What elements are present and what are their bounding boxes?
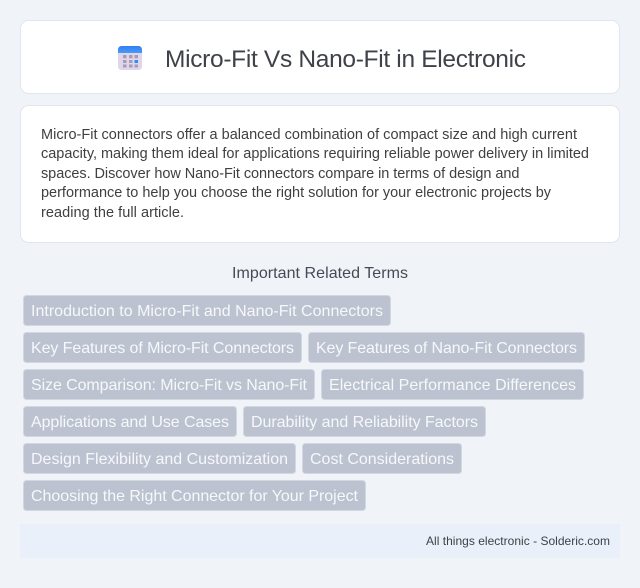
text block: description: Micro-Fit connectors offer a balanced combination of compact size and high current bbox=[41, 127, 577, 143]
tag bbox=[24, 480, 366, 510]
panel: related term tags bbox=[24, 296, 584, 510]
panel: title card bbox=[20, 20, 620, 94]
footer: All things electronic - Solderic.com bbox=[426, 534, 610, 548]
tag bbox=[302, 444, 462, 474]
text block: description: reading the full article. bbox=[41, 205, 184, 221]
title: Micro-Fit Vs Nano-Fit in Electronic bbox=[165, 46, 526, 73]
tag: Durability and Reliability Factors bbox=[251, 414, 478, 431]
tag bbox=[24, 332, 302, 362]
tag: Key Features of Micro-Fit Connectors bbox=[31, 340, 294, 357]
text block: description bbox=[41, 127, 589, 221]
tag: Electrical Performance Differences bbox=[329, 377, 576, 394]
tag bbox=[244, 406, 486, 436]
tag bbox=[24, 296, 390, 326]
text block: description: spaces. Discover how Nano-Fit connectors compare in terms of design and bbox=[41, 166, 520, 182]
tag: Key Features of Nano-Fit Connectors bbox=[316, 340, 577, 357]
tag bbox=[24, 444, 296, 474]
tag bbox=[308, 332, 584, 362]
tag: Applications and Use Cases bbox=[31, 414, 229, 431]
tag: Size Comparison: Micro-Fit vs Nano-Fit bbox=[31, 377, 308, 394]
text block: description: capacity, making them ideal for applications requiring reliable power delivery in limited bbox=[41, 146, 589, 162]
tag bbox=[322, 370, 584, 400]
tag: Cost Considerations bbox=[310, 451, 454, 468]
tag bbox=[24, 370, 314, 400]
text block: description: performance to help you choose the right solution for your electronic projects by bbox=[41, 185, 552, 201]
footer bbox=[20, 524, 620, 558]
tag: Design Flexibility and Customization bbox=[31, 451, 288, 468]
heading: related terms: Important Related Terms bbox=[232, 265, 408, 282]
panel: description bbox=[20, 106, 620, 242]
tag bbox=[24, 406, 236, 436]
tag: Introduction to Micro-Fit and Nano-Fit Connectors bbox=[31, 303, 383, 320]
tag: Choosing the Right Connector for Your Project bbox=[31, 488, 359, 505]
icon: calendar bbox=[118, 46, 142, 70]
